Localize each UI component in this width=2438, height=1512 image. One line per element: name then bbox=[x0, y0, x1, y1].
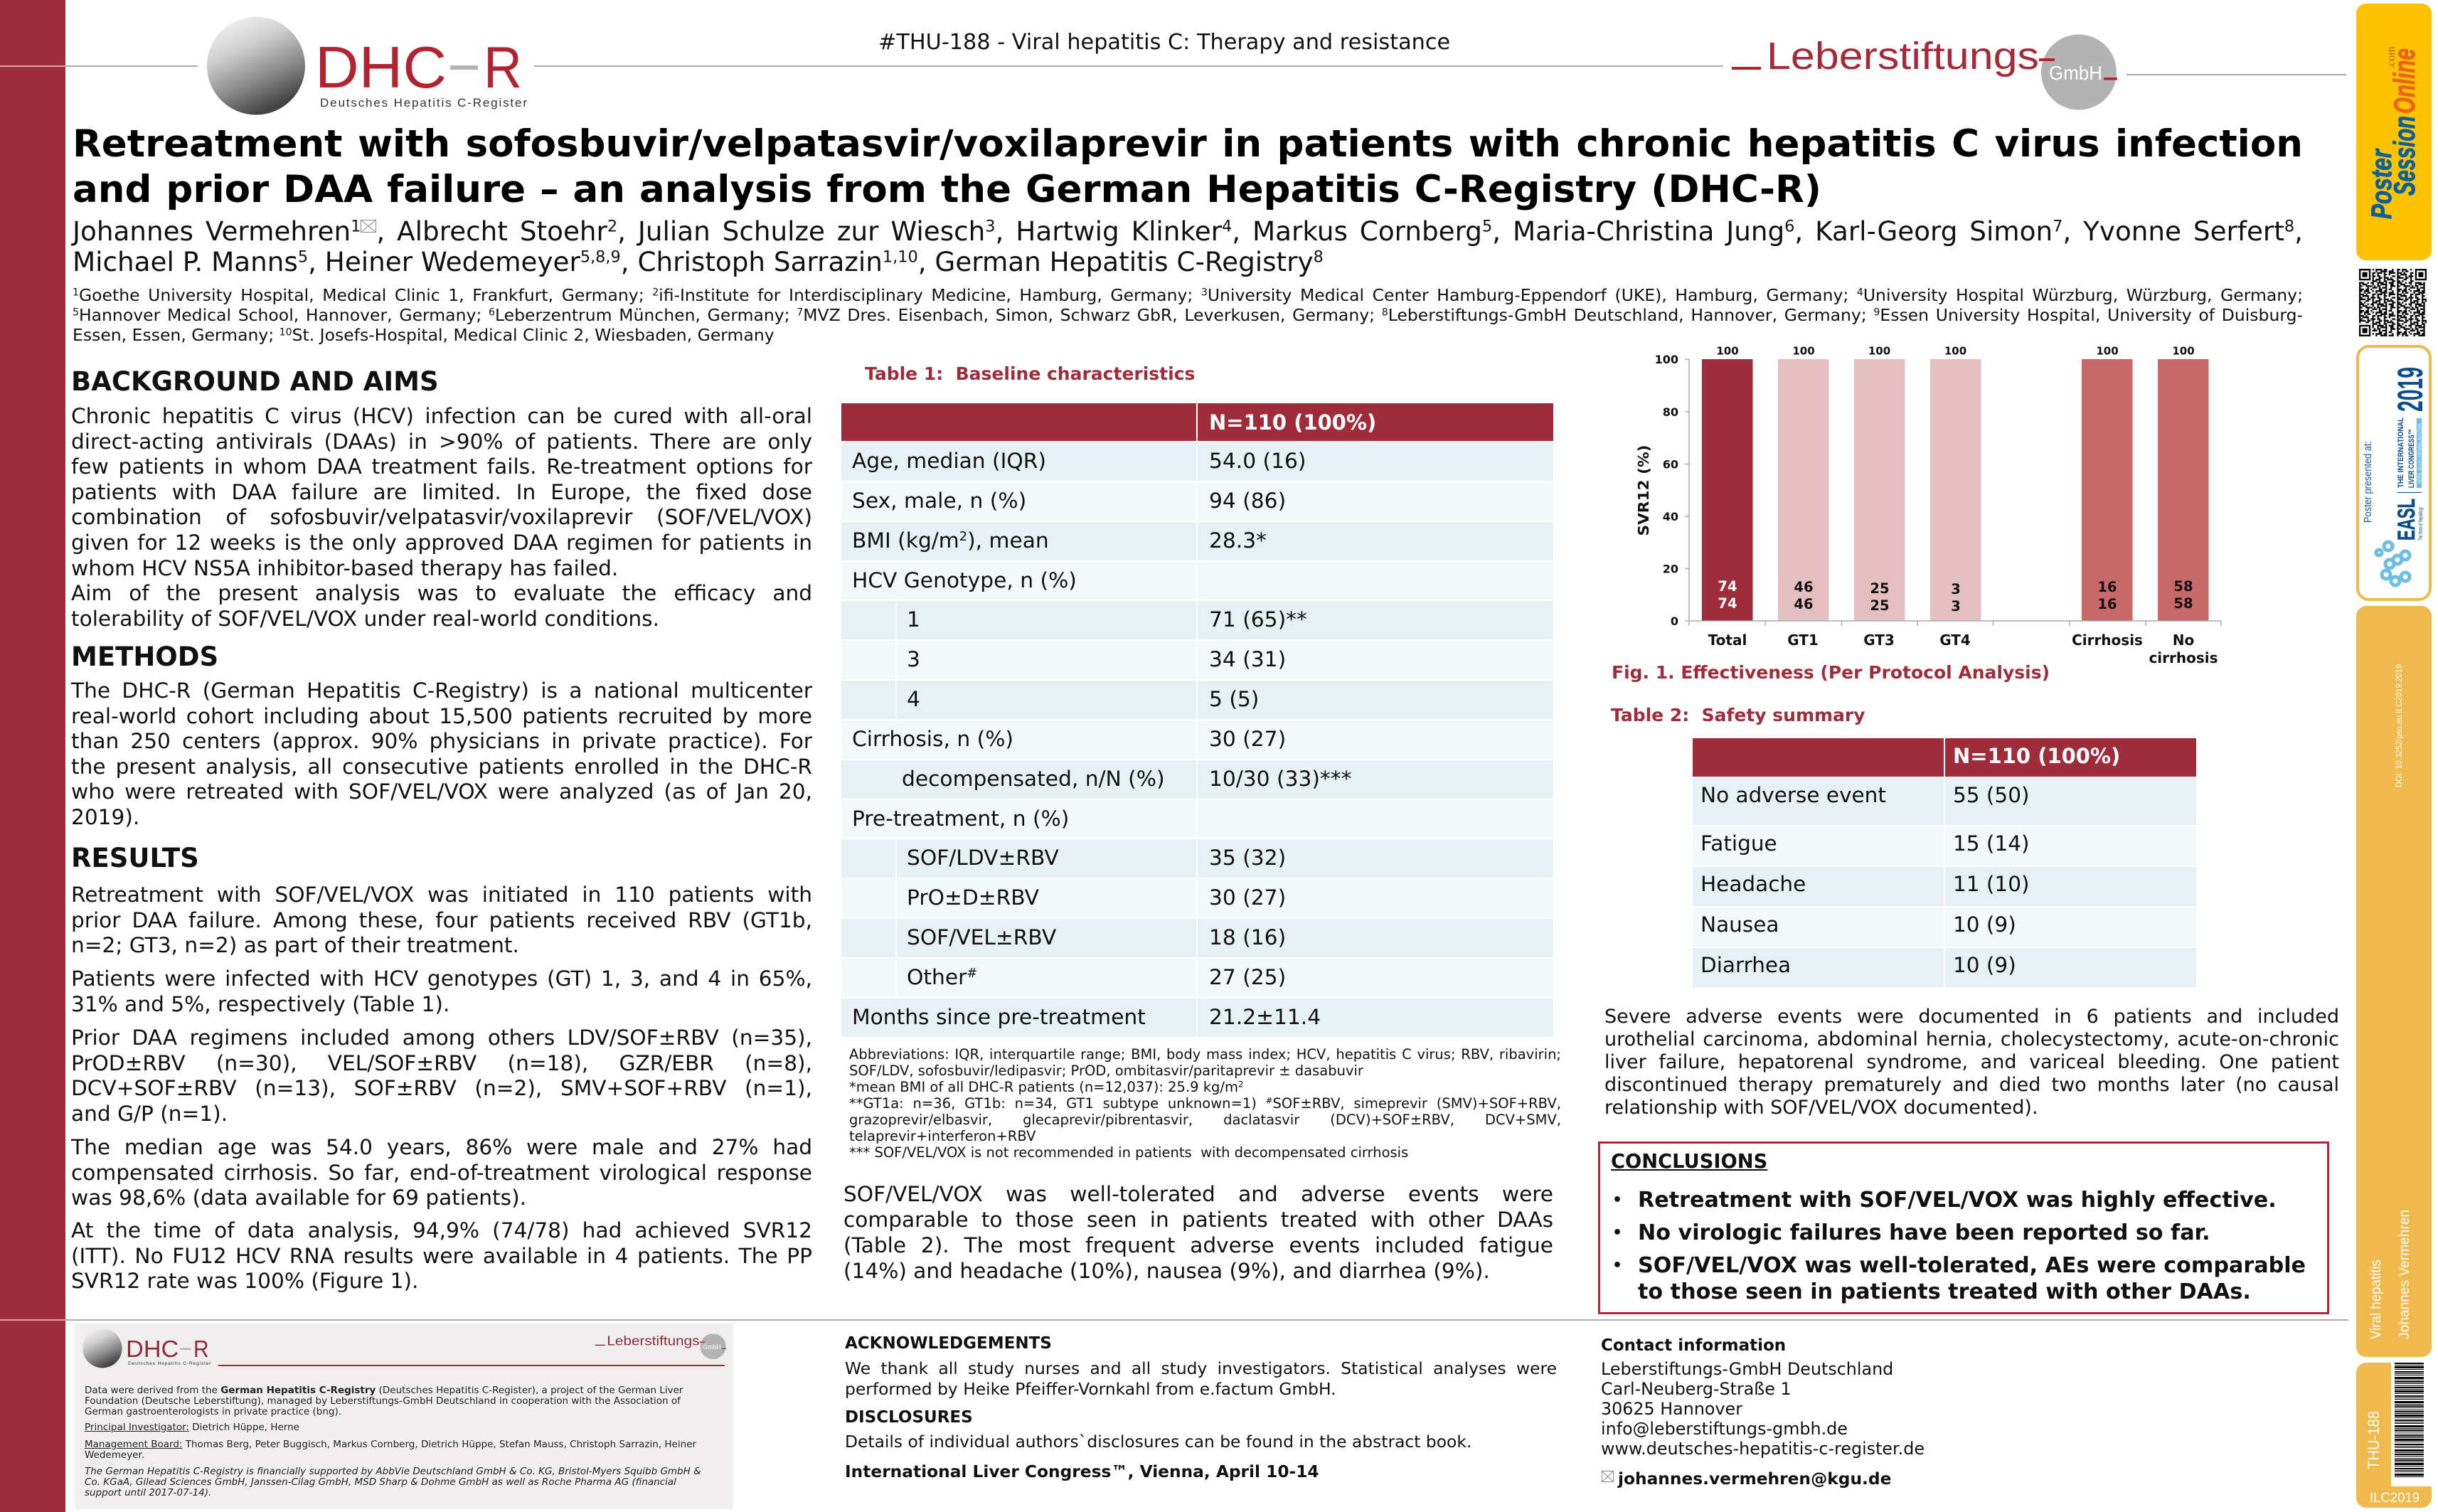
left red sidebar bbox=[0, 0, 65, 1512]
y axis labels: 60 bbox=[1663, 458, 1678, 471]
acknowledgements text bbox=[845, 1358, 1557, 1398]
conclusion bullet 1: Retreatment with SOF/VEL/VOX was highly effective. bbox=[1638, 1188, 2277, 1213]
category labels: No bbox=[2173, 632, 2194, 649]
text: severe adverse events: urothelial carcinoma, abdominal hernia, cholecystectomy, acute-on-chronic bbox=[1604, 1028, 2339, 1050]
icon: envelope bbox=[1602, 1471, 1614, 1482]
logo: Leberstiftungs-GmbH bbox=[1732, 34, 2117, 110]
in-bar counts: 16 bbox=[2097, 579, 2117, 595]
text: tolerability bbox=[843, 1182, 1553, 1283]
management board: Wedemeyer. bbox=[85, 1449, 144, 1461]
text: results, SVR12: SVR12 rate was 100% (Figure 1). bbox=[71, 1269, 418, 1293]
figure caption: Fig. 1. Effectiveness (Per Protocol Analysis) bbox=[1612, 662, 2050, 683]
table 2: safety summary: 11 (10) bbox=[1953, 872, 2029, 896]
table 1 footnotes: grazoprevir/elbasvir, glecaprevir/pibrentasvir, daclatasvir (DCV)+SOF±RBV, DCV+SMV, bbox=[849, 1112, 1561, 1128]
table 1 footnotes: telaprevir+interferon+RBV bbox=[849, 1128, 1036, 1144]
text: results, demographics bbox=[71, 1135, 812, 1210]
text: results, prior regimens: Prior DAA regimens included among others LDV/SOF±RBV (n=35), bbox=[71, 1026, 812, 1050]
authors: Johannes Vermehren1 , Albrecht Stoehr2, Julian Schulze zur Wiesch3, Hartwig Klinker4, Markus Cornberg5, Maria-Christina Jung6, Karl-Georg Simon7, Yvonne Serfert8, bbox=[73, 215, 2303, 247]
table 1 footnotes: SOF/LDV, sofosbuvir/ledipasvir; PrOD, ombitasvir/paritaprevir ± dasabuvir bbox=[849, 1063, 1363, 1079]
text: background and aims: Chronic hepatitis C virus (HCV) infection can be cured with all-oral bbox=[71, 404, 812, 428]
contact details: Carl-Neuberg-Straße 1 bbox=[1601, 1379, 1792, 1399]
table 1: baseline characteristics: Months since pre-treatment bbox=[852, 1005, 1146, 1030]
table 2: safety summary: Headache bbox=[1700, 872, 1806, 896]
table 1: baseline characteristics: SOF/VEL±RBV bbox=[907, 925, 1056, 950]
table 1: baseline characteristics: 3 bbox=[907, 647, 920, 672]
funding statement: The German Hepatitis C-Registry is financially supported by AbbVie Deutschland GmbH & Co. KG, Bristol-Myers Squibb GmbH & bbox=[85, 1465, 701, 1476]
text: results, initiation bbox=[71, 883, 812, 957]
sidebar: congress badge: LIVER CONGRESS™ bbox=[2407, 429, 2416, 488]
sidebar: congress badge: EASL bbox=[2393, 499, 2420, 541]
sidebar: congress badge: Poster presented at: bbox=[2362, 441, 2374, 523]
in-bar counts: 16 bbox=[2097, 596, 2117, 612]
heading: background and aims: BACKGROUND AND AIMS bbox=[71, 366, 439, 397]
contact heading: Contact information bbox=[1601, 1336, 1786, 1355]
in-bar counts: 3 bbox=[1951, 598, 1961, 614]
text: background and aims: combination of sofosbuvir/velpatasvir/voxilaprevir (SOF/VEL/VOX) bbox=[71, 505, 812, 529]
funding statement bbox=[85, 1465, 701, 1498]
contact email: johannes.vermehren@kgu.de bbox=[1618, 1469, 1891, 1489]
logo: DHC-R bbox=[207, 17, 527, 115]
acknowledgements text: We thank all study nurses and all study investigators. Statistical analyses were bbox=[845, 1358, 1557, 1378]
table 1 footnotes: **GT1a: n=36, GT1b: n=34, GT1 subtype unknown=1) #SOF±RBV, simeprevir (SMV)+SOF+RBV, bbox=[849, 1095, 1561, 1112]
text: results, SVR12: (ITT). No FU12 HCV RNA results were available in 4 patients. The PP bbox=[71, 1244, 812, 1268]
affiliations bbox=[73, 285, 2303, 345]
table 1 footnotes: *** SOF/VEL/VOX is not recommended in patients with decompensated cirrhosis bbox=[849, 1144, 1408, 1161]
management board bbox=[85, 1438, 697, 1461]
text: severe adverse events: liver failure, hepatorenal syndrome, and variceal bleeding. One patient bbox=[1604, 1051, 2339, 1073]
text: results, initiation: n=2; GT3, n=2) as part of their treatment. bbox=[71, 933, 519, 957]
text: results, prior regimens: DCV+SOF±RBV (n=13), SOF±RBV (n=2), SMV+SOF+RBV (n=1), bbox=[71, 1076, 812, 1100]
session header: #THU-188 - Viral hepatitis C: Therapy and resistance bbox=[878, 30, 1450, 55]
sidebar: poster session online: Session bbox=[2388, 116, 2421, 196]
principal investigator: Principal Investigator: Dietrich Hüppe, Herne bbox=[85, 1422, 299, 1433]
text: results, demographics: The median age was 54.0 years, 86% were male and 27% had bbox=[71, 1135, 812, 1159]
top value labels: 100 bbox=[1944, 344, 1966, 357]
disclosures heading: DISCLOSURES bbox=[845, 1408, 973, 1427]
contact details: Leberstiftungs-GmbH Deutschland bbox=[1601, 1359, 1893, 1379]
table 2: safety summary: Nausea bbox=[1700, 912, 1779, 937]
table 2: safety summary: 15 (14) bbox=[1953, 831, 2029, 856]
y axis title: SVR12 (%) bbox=[1635, 445, 1652, 536]
mini logo: Leberstiftungs-GmbH: Leberstiftungs bbox=[607, 1333, 700, 1348]
text: severe adverse events: Severe adverse events were documented in 6 patients and included bbox=[1604, 1006, 2339, 1028]
sidebar: poster metadata panel: DOI: 10.3252/pso.eu.ILC2019.2019 bbox=[2394, 664, 2404, 787]
text: background and aims: direct-acting antivirals (DAAs) in >90% of patients. There are only bbox=[71, 430, 812, 454]
heading: table 1: Table 1: Baseline characteristics bbox=[865, 363, 1195, 384]
y axis labels: 20 bbox=[1663, 562, 1678, 576]
acknowledgements text: performed by Heike Pfeiffer-Vornkahl from e.factum GmbH. bbox=[845, 1378, 1336, 1398]
registry description: German gastroenterologists in private practice (bng). bbox=[85, 1405, 341, 1417]
mini logo: DHC-R: R bbox=[193, 1336, 208, 1363]
logo: DHC-R: DHC bbox=[315, 34, 447, 100]
logo: Leberstiftungs-GmbH: GmbH bbox=[2049, 62, 2102, 84]
table 2: safety summary: 10 (9) bbox=[1953, 953, 2016, 977]
text: methods: the present analysis, all consecutive patients enrolled in the DHC-R bbox=[71, 755, 812, 779]
text: methods: The DHC-R (German Hepatitis C-Registry) is a national multicenter bbox=[71, 678, 812, 703]
table 1: baseline characteristics: 54.0 (16) bbox=[1209, 449, 1306, 474]
conclusion bullet 3 bbox=[1612, 1253, 2306, 1304]
table 1: baseline characteristics: 4 bbox=[907, 687, 920, 712]
mini logo: DHC-R: DHC bbox=[126, 1336, 179, 1363]
table 1 footnotes: Abbreviations: IQR, interquartile range; BMI, body mass index; HCV, hepatitis C virus; RBV, ribavirin; bbox=[849, 1046, 1561, 1063]
category labels: Total bbox=[1708, 632, 1747, 649]
table 2: safety summary: Diarrhea bbox=[1700, 953, 1791, 977]
in-bar counts: 46 bbox=[1794, 596, 1814, 612]
sidebar: congress badge: APRIL 10-14 | VIENNA, AUSTRIA bbox=[2418, 423, 2422, 484]
affiliations: 1Goethe University Hospital, Medical Clinic 1, Frankfurt, Germany; 2ifi-Institute for Interdisciplinary Medicine, Hamburg, Germany; 3University Medical Center Hamburg-Eppendorf (UKE), Hamburg, Germany; 4University Hospital Würzburg, Würzburg, Germany; bbox=[73, 285, 2303, 305]
text: tolerability: comparable to those seen in patients treated with other DAAs bbox=[843, 1208, 1553, 1232]
text: background and aims: given for 12 weeks is the only approved DAA regimen for patients in bbox=[71, 531, 812, 555]
text: results, initiation: Retreatment with SOF/VEL/VOX was initiated in 110 patients with bbox=[71, 883, 812, 907]
table 1: baseline characteristics: 10/30 (33)*** bbox=[1209, 767, 1351, 792]
table 1: baseline characteristics: 18 (16) bbox=[1209, 925, 1286, 950]
y axis labels: 40 bbox=[1663, 510, 1678, 523]
header rules bbox=[0, 65, 2346, 75]
sidebar: poster session online bbox=[2356, 4, 2432, 260]
text: results, genotypes bbox=[71, 967, 812, 1016]
table 1: baseline characteristics: 30 (27) bbox=[1209, 727, 1286, 752]
table 1: baseline characteristics: 35 (32) bbox=[1209, 846, 1286, 871]
table 1: baseline characteristics: 5 (5) bbox=[1209, 687, 1259, 712]
conclusion bullet 3: • bbox=[1612, 1257, 1622, 1274]
table 1: baseline characteristics: 28.3* bbox=[1209, 528, 1267, 553]
text: severe adverse events bbox=[1604, 1006, 2339, 1119]
table 2: safety summary bbox=[1693, 738, 2196, 987]
bars bbox=[1702, 359, 2209, 621]
table 1: baseline characteristics: BMI (kg/m2), mean bbox=[852, 528, 1049, 553]
management board: Management Board: Thomas Berg, Peter Buggisch, Markus Cornberg, Dietrich Hüppe, Stefan Mauss, Christoph Sarrazin, Heiner bbox=[85, 1438, 696, 1449]
text: results, initiation: prior DAA failure. Among these, four patients received RBV (GT1b, bbox=[71, 908, 812, 932]
top value labels bbox=[1716, 344, 2195, 357]
heading: results: RESULTS bbox=[71, 843, 199, 873]
text: methods bbox=[71, 678, 812, 829]
sidebar: congress badge: The Home of Hepatology bbox=[2417, 507, 2424, 541]
top value labels: 100 bbox=[2096, 344, 2119, 357]
table 1 footnotes bbox=[849, 1046, 1561, 1161]
in-bar counts bbox=[1718, 578, 2193, 614]
in-bar counts: 74 bbox=[1718, 578, 1737, 595]
acknowledgements heading: ACKNOWLEDGEMENTS bbox=[845, 1334, 1052, 1353]
text: severe adverse events: relationship with SOF/VEL/VOX documented). bbox=[1604, 1097, 2038, 1119]
table 1: baseline characteristics: PrO±D±RBV bbox=[907, 885, 1039, 910]
table 1: baseline characteristics: Pre-treatment, n (%) bbox=[852, 806, 1069, 831]
conclusion bullet 2: • bbox=[1612, 1224, 1622, 1242]
sidebar: poster number and barcode: ILC2019 bbox=[2370, 1491, 2420, 1506]
registry description: Foundation (Deutsche Leberstiftung), managed by Leberstiftungs-GmbH Deutschland in cooperation with the Association of bbox=[85, 1395, 681, 1407]
bar chart: SVR12 effectiveness bbox=[1635, 344, 2222, 666]
top value labels: 100 bbox=[1716, 344, 1739, 357]
panel: conclusions bbox=[1598, 1141, 2329, 1314]
registry description: Data were derived from the German Hepatitis C-Registry (Deutsches Hepatitis C-Register), a project of the German Liver bbox=[85, 1384, 683, 1395]
conclusions heading: CONCLUSIONS bbox=[1611, 1151, 1767, 1173]
sidebar: poster number and barcode: THU-188 bbox=[2365, 1411, 2383, 1469]
table 1: baseline characteristics: 1 bbox=[907, 607, 920, 632]
text: background and aims bbox=[71, 404, 812, 631]
congress line: International Liver Congress™, Vienna, April 10-14 bbox=[845, 1462, 1319, 1481]
table 2: safety summary: Fatigue bbox=[1700, 831, 1777, 856]
mini logo: Leberstiftungs-GmbH: GmbH bbox=[703, 1343, 721, 1351]
y axis labels: 80 bbox=[1663, 405, 1678, 419]
text: results, prior regimens: and G/P (n=1). bbox=[71, 1102, 228, 1126]
sidebar: poster number and barcode bbox=[2356, 1363, 2432, 1508]
sidebar: poster session online: Online bbox=[2388, 48, 2421, 114]
logo: DHC-R: R bbox=[484, 34, 522, 100]
table 1: baseline characteristics: 21.2±11.4 bbox=[1209, 1005, 1321, 1030]
axes bbox=[1685, 359, 2221, 626]
panel: registry information bbox=[75, 1324, 733, 1509]
in-bar counts: 74 bbox=[1718, 595, 1737, 612]
table 1: baseline characteristics: 71 (65)** bbox=[1209, 607, 1307, 632]
text: results, genotypes: Patients were infected with HCV genotypes (GT) 1, 3, and 4 in 65%, bbox=[71, 967, 812, 991]
title bbox=[73, 122, 2303, 211]
title: Retreatment with sofosbuvir/velpatasvir/voxilaprevir in patients with chronic hepatitis C virus infection bbox=[73, 122, 2303, 166]
mini logo: DHC-R bbox=[82, 1329, 211, 1368]
logo: DHC-R: Deutsches Hepatitis C-Register bbox=[320, 96, 527, 110]
authors: Michael P. Manns5, Heiner Wedemeyer5,8,9, Christoph Sarrazin1,10, German Hepatitis C-Registry8 bbox=[73, 246, 1324, 277]
in-bar counts: 46 bbox=[1794, 579, 1814, 595]
conclusion bullet 2: No virologic failures have been reported so far. bbox=[1638, 1220, 2210, 1245]
QR code bbox=[2359, 269, 2427, 336]
text: background and aims: few patients in whom DAA treatment fails. Re-treatment options for bbox=[71, 454, 812, 479]
heading: methods: METHODS bbox=[71, 641, 218, 672]
authors bbox=[71, 215, 2303, 277]
table 1: baseline characteristics: Cirrhosis, n (%) bbox=[852, 727, 1013, 752]
contact details: info@leberstiftungs-gmbh.de bbox=[1601, 1419, 1848, 1439]
heading: table 2: Table 2: Safety summary bbox=[1611, 705, 1865, 725]
table 1: baseline characteristics bbox=[841, 403, 1553, 1037]
table 1: baseline characteristics: 27 (25) bbox=[1209, 965, 1286, 990]
table 1: baseline characteristics: decompensated, n/N (%) bbox=[902, 767, 1165, 792]
text: tolerability: SOF/VEL/VOX was well-tolerated and adverse events were bbox=[843, 1182, 1553, 1206]
text: severe adverse events: discontinued therapy prematurely and died two months later (no causal bbox=[1604, 1074, 2339, 1096]
in-bar counts: 25 bbox=[1870, 580, 1890, 597]
in-bar counts: 58 bbox=[2173, 595, 2193, 612]
y axis labels bbox=[1655, 353, 1678, 628]
top value labels: 100 bbox=[1868, 344, 1890, 357]
table 1: baseline characteristics: Other# bbox=[907, 965, 977, 990]
affiliations: Essen, Essen, Germany; 10St. Josefs-Hospital, Medical Clinic 2, Wiesbaden, Germany bbox=[73, 325, 774, 345]
category labels: Cirrhosis bbox=[2072, 632, 2143, 649]
disclosures text: Details of individual authors`disclosures can be found in the abstract book. bbox=[845, 1431, 1471, 1451]
text: results, prior regimens bbox=[71, 1026, 812, 1126]
contact details: 30625 Hannover bbox=[1601, 1399, 1742, 1419]
text: background and aims: Aim of the present analysis was to evaluate the efficacy and bbox=[71, 581, 812, 605]
table 1 footnotes: *mean BMI of all DHC-R patients (n=12,037): 25.9 kg/m2 bbox=[849, 1079, 1243, 1095]
conclusion bullet 3: SOF/VEL/VOX was well-tolerated, AEs were comparable bbox=[1638, 1253, 2306, 1278]
top value labels: 100 bbox=[2172, 344, 2195, 357]
table 1: baseline characteristics: 94 (86) bbox=[1209, 489, 1286, 513]
contact details: www.deutsches-hepatitis-c-register.de bbox=[1601, 1439, 1925, 1459]
sidebar: poster metadata panel: Johannes Vermehren bbox=[2397, 1210, 2412, 1339]
y axis labels: 100 bbox=[1655, 353, 1678, 366]
funding statement: support until 2017-07-14). bbox=[85, 1486, 211, 1498]
sidebar: poster session online: Poster bbox=[2366, 148, 2397, 219]
text: results, demographics: was 98,6% (data available for 69 patients). bbox=[71, 1186, 526, 1210]
logo: Leberstiftungs-GmbH: Leberstiftungs bbox=[1767, 35, 2039, 78]
table 1: baseline characteristics: Age, median (IQR) bbox=[852, 449, 1046, 474]
sidebar: poster metadata panel bbox=[2356, 606, 2432, 1357]
conclusion bullet 1: • bbox=[1612, 1191, 1622, 1209]
text: results, SVR12 bbox=[71, 1218, 812, 1293]
mini rule bbox=[218, 1365, 725, 1366]
y axis labels: 0 bbox=[1671, 614, 1678, 628]
text: results, prior regimens: PrOD±RBV (n=30), VEL/SOF±RBV (n=18), GZR/EBR (n=8), bbox=[71, 1051, 812, 1075]
mini logo: DHC-R: Deutsches Hepatitis C-Register bbox=[128, 1361, 211, 1366]
table 2: safety summary: 10 (9) bbox=[1953, 912, 2016, 937]
category labels: GT3 bbox=[1863, 632, 1895, 649]
text: results, SVR12: At the time of data analysis, 94,9% (74/78) had achieved SVR12 bbox=[71, 1218, 812, 1242]
title: and prior DAA failure – an analysis from the German Hepatitis C-Registry (DHC-R) bbox=[73, 168, 1821, 211]
table 2: safety summary: N=110 (100%) bbox=[1953, 744, 2120, 768]
footer rule bbox=[0, 1319, 2348, 1321]
category labels: GT4 bbox=[1939, 632, 1971, 649]
table 1: baseline characteristics: SOF/LDV±RBV bbox=[907, 846, 1059, 871]
category labels bbox=[1708, 632, 2218, 666]
table 2: safety summary: No adverse event bbox=[1700, 783, 1886, 807]
text: tolerability: (Table 2). The most frequent adverse events included fatigue bbox=[843, 1233, 1553, 1257]
table 1: baseline characteristics: 30 (27) bbox=[1209, 885, 1286, 910]
text: background and aims: patients with DAA failure are limited. In Europe, the fixed dose bbox=[71, 480, 812, 504]
in-bar counts: 58 bbox=[2173, 578, 2193, 595]
table 1: baseline characteristics: N=110 (100%) bbox=[1209, 410, 1376, 435]
text: methods: who were retreated with SOF/VEL/VOX were analyzed (as of Jan 20, bbox=[71, 779, 812, 804]
table 1: baseline characteristics: 34 (31) bbox=[1209, 647, 1286, 672]
in-bar counts: 25 bbox=[1870, 597, 1890, 614]
top value labels: 100 bbox=[1792, 344, 1815, 357]
contact details bbox=[1601, 1359, 1925, 1459]
table 2: safety summary: 55 (50) bbox=[1953, 783, 2029, 807]
table 1: baseline characteristics: HCV Genotype, n (%) bbox=[852, 568, 1077, 593]
table 1: baseline characteristics: Sex, male, n (%) bbox=[852, 489, 1026, 513]
mini logo: Leberstiftungs-GmbH bbox=[595, 1333, 726, 1360]
conclusion bullet 3: to those seen in patients treated with other DAAs. bbox=[1638, 1279, 2251, 1304]
sidebar: congress badge bbox=[2356, 345, 2432, 601]
text: methods: 2019). bbox=[71, 805, 139, 829]
text: results, genotypes: 31% and 5%, respectively (Table 1). bbox=[71, 992, 449, 1016]
funding statement: Co. KGaA, Gilead Sciences GmbH, Janssen-Cilag GmbH, MSD Sharp & Dohme GmbH as well as Roche Pharma AG (financial bbox=[85, 1476, 676, 1488]
sidebar: poster session online: .com bbox=[2385, 46, 2397, 69]
in-bar counts: 3 bbox=[1951, 581, 1961, 597]
sidebar: congress badge: THE INTERNATIONAL bbox=[2397, 417, 2405, 488]
affiliations: 5Hannover Medical School, Hannover, Germany; 6Leberzentrum München, Germany; 7MVZ Dres. Eisenbach, Simon, Schwarz GbR, Leverkusen, Germany; 8Leberstiftungs-GmbH Deutschland, Hannover, Germany; 9Essen University Hospital, University of Duisburg- bbox=[73, 305, 2303, 325]
registry description bbox=[85, 1384, 683, 1417]
text: methods: real-world cohort including about 15,500 patients recruited by more bbox=[71, 704, 812, 728]
text: tolerability: (14%) and headache (10%), nausea (9%), and diarrhea (9%). bbox=[843, 1259, 1490, 1283]
category labels: GT1 bbox=[1787, 632, 1819, 649]
text: background and aims: tolerability of SOF/VEL/VOX under real-world conditions. bbox=[71, 607, 659, 631]
category labels: cirrhosis bbox=[2149, 649, 2218, 666]
text: background and aims: whom HCV NS5A inhibitor-based therapy has failed. bbox=[71, 556, 618, 580]
text: results, demographics: compensated cirrhosis. So far, end-of-treatment virological response bbox=[71, 1161, 812, 1185]
text: methods: than 250 centers (approx. 90% physicians in private practice). For bbox=[71, 729, 812, 753]
sidebar: poster metadata panel: Viral hepatitis bbox=[2368, 1260, 2384, 1339]
